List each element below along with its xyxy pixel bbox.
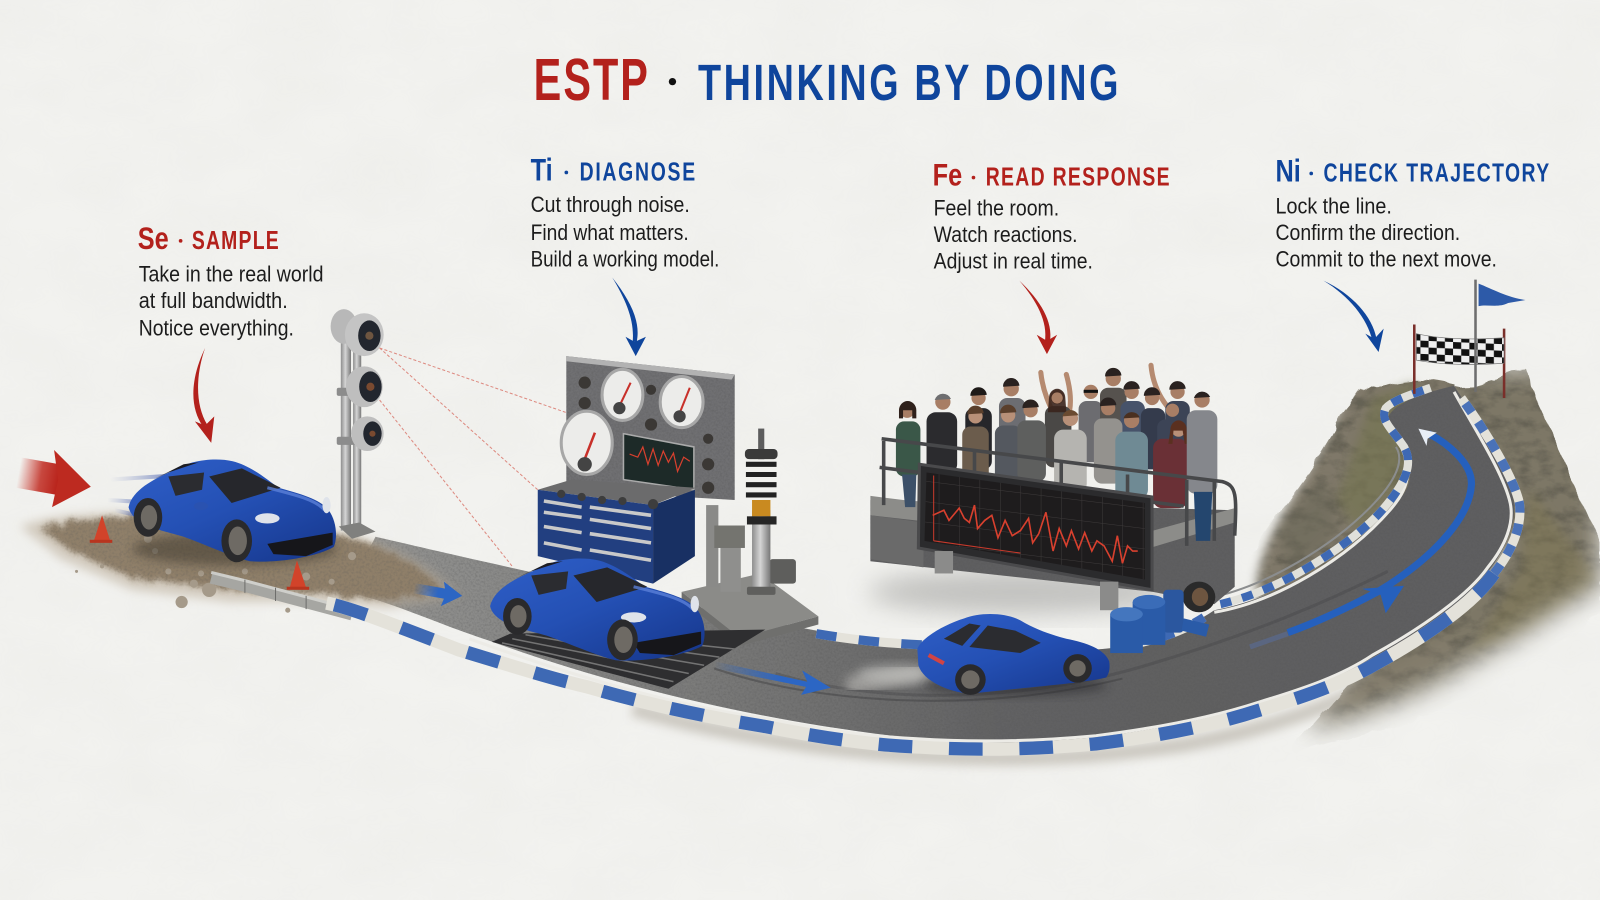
car 1: sampling [107, 459, 337, 565]
concrete barrier [211, 572, 352, 614]
arrow: road big blue up the hill [1250, 429, 1471, 647]
text block: Se sample: SAMPLE [192, 225, 279, 255]
text block: Fe read response: READ RESPONSE [986, 162, 1170, 191]
waveform screen [623, 434, 694, 490]
car 2: on grate [488, 558, 705, 661]
heartbeat display board [918, 464, 1152, 610]
text block: Ti diagnose [531, 153, 719, 271]
platform shadow [867, 569, 1173, 614]
shock absorber rig [682, 429, 818, 646]
text block: Fe read response: Fe [933, 158, 962, 193]
gauge dials [561, 369, 714, 494]
inner curb: blue and white [816, 388, 1431, 647]
dirt patch [20, 510, 459, 613]
text block: Ni check trajectory: CHECK TRAJECTORY [1323, 158, 1549, 187]
text block: Se sample: Take in the real world [139, 262, 323, 287]
text block: Ti diagnose: Ti [531, 153, 553, 188]
mountain: left rock [1230, 378, 1454, 602]
text block: Ti diagnose: Cut through noise. [531, 192, 690, 217]
text block: Ni check trajectory: Ni [1276, 154, 1301, 189]
text block: Ni check trajectory [1276, 154, 1549, 271]
back row [965, 368, 1190, 469]
goal flag [1476, 280, 1526, 392]
text block: Ni check trajectory: Confirm the direction. [1276, 220, 1460, 245]
blue barrels and tire [1110, 582, 1215, 653]
sensor pole [331, 309, 384, 539]
arrow: Ti callout [612, 278, 646, 356]
title: ESTP [534, 47, 648, 113]
cones [90, 515, 309, 590]
spectator platform [870, 496, 1235, 604]
railing [880, 439, 1236, 546]
text block: Se sample: Notice everything. [139, 316, 294, 341]
arrow: Ni callout [1323, 281, 1384, 352]
arrow: road blue small [413, 582, 462, 606]
text block: Fe read response [933, 158, 1170, 273]
mountain: right peak and scree [1286, 369, 1600, 755]
arrow: Fe callout [1019, 281, 1057, 354]
road [347, 386, 1514, 743]
text block: Ni check trajectory: Lock the line. [1276, 193, 1392, 218]
text block: Se sample: at full bandwidth. [139, 288, 288, 313]
sensor rays [380, 348, 568, 566]
title [534, 47, 1119, 113]
car 3: cornering [857, 614, 1110, 696]
title: THINKING BY DOING [698, 53, 1119, 111]
text block: Fe read response: Feel the room. [934, 195, 1059, 220]
sensor grate pad [492, 630, 765, 689]
arrow: Se callout [193, 348, 214, 443]
ground shadow under outer curb [633, 643, 1449, 758]
arrow: red entry arrow [16, 450, 91, 507]
text block: Se sample [138, 221, 323, 341]
text block: Ti diagnose: DIAGNOSE [580, 157, 695, 186]
front row [896, 392, 1217, 541]
crowd [896, 365, 1217, 541]
text block: Fe read response: Adjust in real time. [934, 248, 1093, 273]
text block: Fe read response: Watch reactions. [934, 222, 1078, 247]
text block: Ti diagnose: Find what matters. [531, 220, 689, 245]
tool cabinet [538, 480, 696, 584]
checkered finish banner [1414, 324, 1504, 398]
text block: Se sample: Se [138, 221, 169, 257]
text block: Ti diagnose: Build a working model. [531, 246, 719, 271]
outer curb: blue and white [327, 398, 1520, 749]
diagnostic panel [90, 280, 1526, 696]
text block: Ni check trajectory: Commit to the next move. [1276, 246, 1497, 271]
arrow: road blue medium [714, 661, 831, 695]
road white edge lines [469, 392, 1511, 741]
